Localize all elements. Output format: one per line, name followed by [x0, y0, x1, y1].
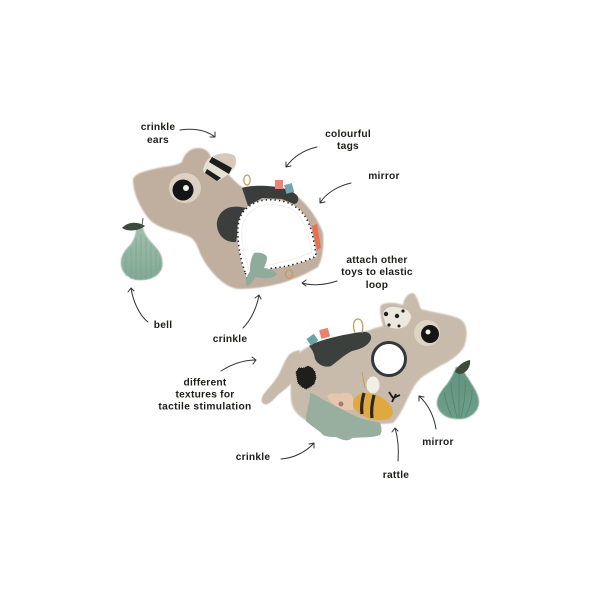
flower	[327, 393, 353, 410]
gold string	[362, 372, 365, 388]
plush body	[133, 148, 323, 289]
arrow: mirror lower	[419, 396, 436, 429]
tags	[306, 328, 330, 346]
gold loop back	[354, 319, 363, 333]
ear: striped	[203, 153, 236, 181]
label: different textures: different	[184, 378, 227, 388]
colour tags	[275, 180, 321, 250]
gold loops	[244, 175, 292, 278]
label: crinkle: crinkle	[213, 334, 247, 345]
pear bell	[121, 218, 163, 280]
arrow: colourful tags	[286, 147, 317, 167]
label: colourful tags	[325, 129, 371, 152]
label: attach other toys to elastic loop: attach other	[346, 255, 408, 266]
crinkle knot	[246, 253, 277, 286]
arrow: elastic loop	[302, 280, 337, 286]
eye	[414, 320, 440, 346]
arrow: crinkle	[243, 295, 261, 328]
white crinkle	[366, 376, 380, 394]
black texture patch	[296, 366, 316, 389]
plush body	[291, 293, 467, 424]
pear bell right	[437, 360, 479, 419]
dark patch top	[242, 186, 298, 206]
label: mirror lower: mirror	[422, 437, 454, 448]
label: rattle: rattle	[383, 470, 409, 481]
label: attach other toys to elastic loop: loop	[366, 280, 388, 291]
round mirror	[372, 342, 406, 376]
corduroy dark patch	[309, 332, 371, 367]
label: crinkle lower: crinkle	[236, 452, 270, 463]
label: crinkle ears: ears	[147, 135, 169, 146]
toy: back view cow with textures	[262, 293, 479, 440]
tail	[262, 350, 300, 404]
arrow: bell	[128, 288, 148, 322]
label: attach other toys to elastic loop: toys to elastic	[341, 267, 413, 278]
label: mirror: mirror	[368, 171, 400, 182]
arrow: rattle	[392, 428, 398, 461]
label: attach other toys to elastic loop	[341, 255, 413, 291]
arrow: crinkle lower	[281, 443, 314, 459]
label: different textures: textures for	[175, 390, 235, 400]
label: colourful tags: tags	[337, 141, 359, 152]
eye	[169, 173, 201, 203]
arrow: different textures	[221, 357, 256, 371]
mirror panel	[238, 200, 316, 278]
ear spotted	[383, 307, 411, 329]
label: crinkle ears	[141, 122, 175, 146]
label: different textures: tactile stimulation	[158, 402, 252, 412]
label: crinkle ears: crinkle	[141, 122, 175, 133]
bee	[353, 392, 400, 420]
label: colourful tags: colourful	[325, 129, 371, 140]
toy: front view cow with mirror	[121, 148, 323, 289]
arrow: mirror	[320, 183, 351, 203]
crinkle sage cloth	[306, 393, 382, 440]
arrow: crinkle ears	[180, 129, 215, 137]
label: bell: bell	[154, 320, 172, 331]
label: different textures	[158, 378, 252, 412]
dark patch side	[217, 207, 246, 242]
